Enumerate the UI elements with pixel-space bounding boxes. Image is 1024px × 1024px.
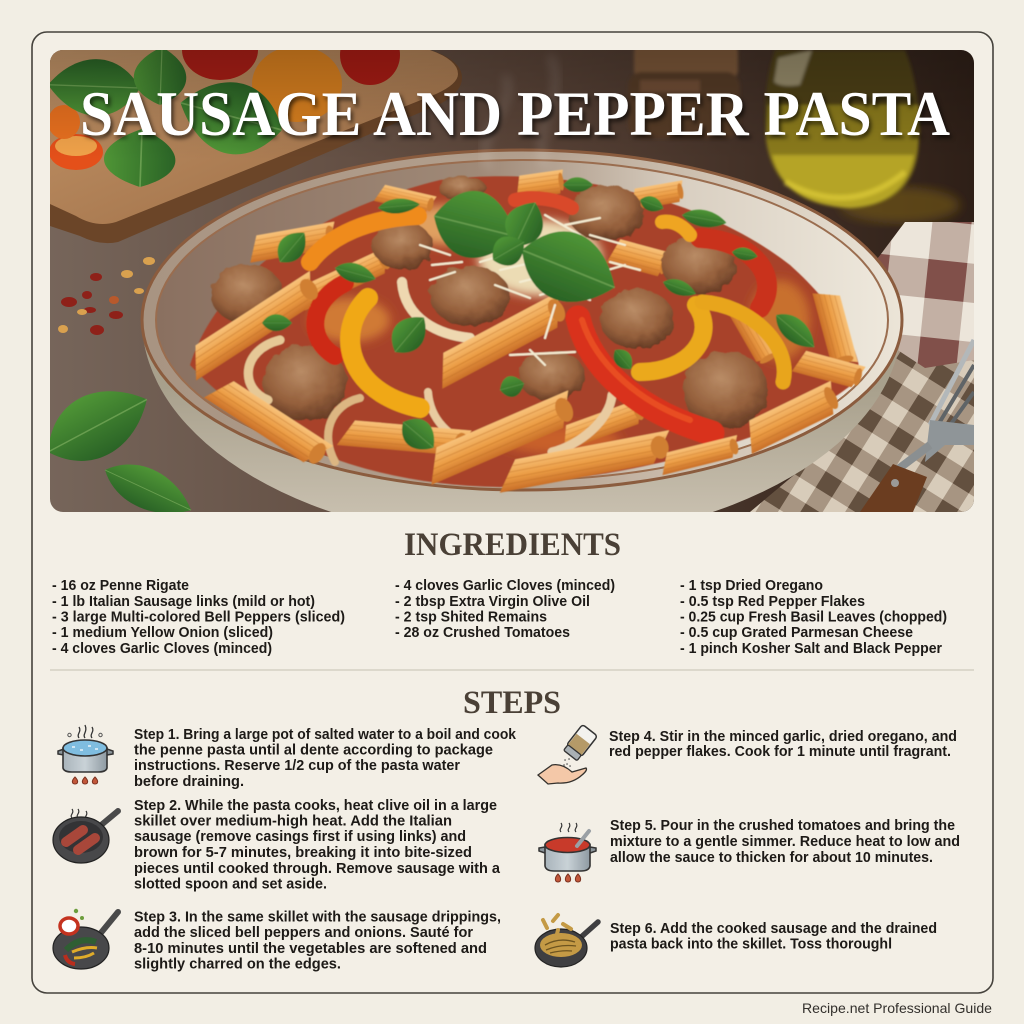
ingredients column 3: - 0.5 cup Grated Parmesan Cheese (680, 625, 913, 641)
step 2 text: pieces until cooked through. Remove sausage with a (134, 861, 501, 877)
step 5 text (610, 818, 960, 866)
garnish basil (434, 190, 616, 302)
bell pepper strips and onions (248, 198, 784, 462)
ingredients column 1: - 1 lb Italian Sausage links (mild or hot) (52, 594, 315, 610)
step 3 text: add the sliced bell peppers and onions. Sauté for (134, 925, 473, 941)
bowl rim (142, 150, 902, 490)
hero food photo illustration (50, 50, 974, 512)
title: SAUSAGE AND PEPPER PASTA (80, 79, 950, 149)
back penne (246, 169, 866, 451)
step 6 text: pasta back into the skillet. Toss thoroughl (610, 936, 892, 952)
icon: skillet with peppers (53, 909, 118, 969)
checked napkin (750, 222, 974, 512)
ingredients column 2: - 2 tbsp Extra Virgin Olive Oil (395, 594, 590, 610)
icon: boiling pot (58, 725, 113, 784)
ingredients column 3: - 0.5 tsp Red Pepper Flakes (680, 594, 865, 610)
wooden board (50, 50, 462, 243)
sauce bed (190, 176, 860, 487)
bowl body (144, 344, 900, 512)
step 4 text: red pepper flakes. Cook for 1 minute until fragrant. (609, 744, 951, 760)
pasta bowl (142, 150, 902, 542)
ingredients column 3: - 1 tsp Dried Oregano (680, 578, 823, 594)
step 1 text: instructions. Reserve 1/2 cup of the pasta water (134, 758, 460, 774)
step 2 text: brown for 5-7 minutes, breaking it into bite-sized (134, 845, 472, 861)
step 2 text: skillet over medium-high heat. Add the Italian (134, 814, 452, 830)
ingredients column 1: - 16 oz Penne Rigate (52, 578, 189, 594)
step 5 text: allow the sauce to thicken for about 10 minutes. (610, 850, 933, 866)
parmesan shreds (420, 215, 640, 365)
step 6 text (610, 921, 937, 952)
heading: ingredients: INGREDIENTS (404, 527, 621, 563)
step 1 text: before draining. (134, 774, 244, 790)
icon: simmering sauce pot (539, 823, 596, 882)
steam (485, 55, 556, 170)
ingredients column 3: - 0.25 cup Fresh Basil Leaves (chopped) (680, 610, 947, 626)
pepper mill (630, 50, 740, 137)
footer credit: Recipe.net Professional Guide (802, 1000, 992, 1016)
olive oil bottle (765, 50, 960, 223)
ingredients column 1: - 1 medium Yellow Onion (sliced) (52, 625, 273, 641)
ingredients column 1: - 3 large Multi-colored Bell Peppers (sliced) (52, 610, 345, 626)
sausage pieces (211, 176, 768, 429)
step 1 text: Step 1. Bring a large pot of salted water to a boil and cook (134, 727, 517, 743)
icon: spice shaker over hand (538, 724, 597, 784)
ingredients column 3 (680, 578, 947, 657)
heading: steps: STEPS (463, 685, 561, 721)
step 3 text: slightly charred on the edges. (134, 956, 341, 972)
step 3 text (134, 910, 501, 972)
ingredients column 3: - 1 pinch Kosher Salt and Black Pepper (680, 641, 942, 657)
sauce mottling and cheese base (310, 205, 810, 454)
step 3 text: Step 3. In the same skillet with the sausage drippings, (134, 910, 501, 926)
step 1 text: the penne pasta until al dente according to package (134, 742, 493, 758)
ingredients column 1: - 4 cloves Garlic Cloves (minced) (52, 641, 272, 657)
tomatoes and pepper slices (50, 50, 400, 170)
pasta food group (180, 169, 866, 493)
step 2 text (134, 798, 501, 892)
step 5 text: Step 5. Pour in the crushed tomatoes and bring the (610, 818, 955, 834)
step 6 text: Step 6. Add the cooked sausage and the drained (610, 921, 937, 937)
ingredients column 2: - 2 tsp Shited Remains (395, 610, 547, 626)
chili flakes (58, 257, 155, 335)
basil bits in pasta (262, 177, 822, 459)
table surface (50, 50, 974, 512)
step 2 text: Step 2. While the pasta cooks, heat clive oil in a large (134, 798, 497, 814)
ingredients column 2 (395, 578, 615, 641)
basil on table (50, 391, 192, 512)
step 5 text: mixture to a gentle simmer. Reduce heat to low and (610, 834, 960, 850)
step 1 text (134, 727, 517, 790)
step 2 text: sausage (remove casings first if using links) and (134, 829, 466, 845)
basil on board (47, 46, 291, 188)
icon: skillet with sausages (53, 809, 118, 863)
ingredients column 2: - 28 oz Crushed Tomatoes (395, 625, 570, 641)
top shading behind title (50, 50, 974, 142)
front penne (180, 271, 844, 493)
step 2 text: slotted spoon and set aside. (134, 876, 327, 892)
bowl well (156, 160, 888, 480)
step 3 text: 8-10 minutes until the vegetables are softened and (134, 941, 487, 957)
ingredients column 2: - 4 cloves Garlic Cloves (minced) (395, 578, 615, 594)
step 4 text: Step 4. Stir in the minced garlic, dried oregano, and (609, 729, 957, 745)
ingredients column 1 (52, 578, 345, 657)
fork (860, 340, 974, 512)
step 4 text (609, 729, 957, 760)
icon: skillet tossing pasta (535, 915, 598, 967)
